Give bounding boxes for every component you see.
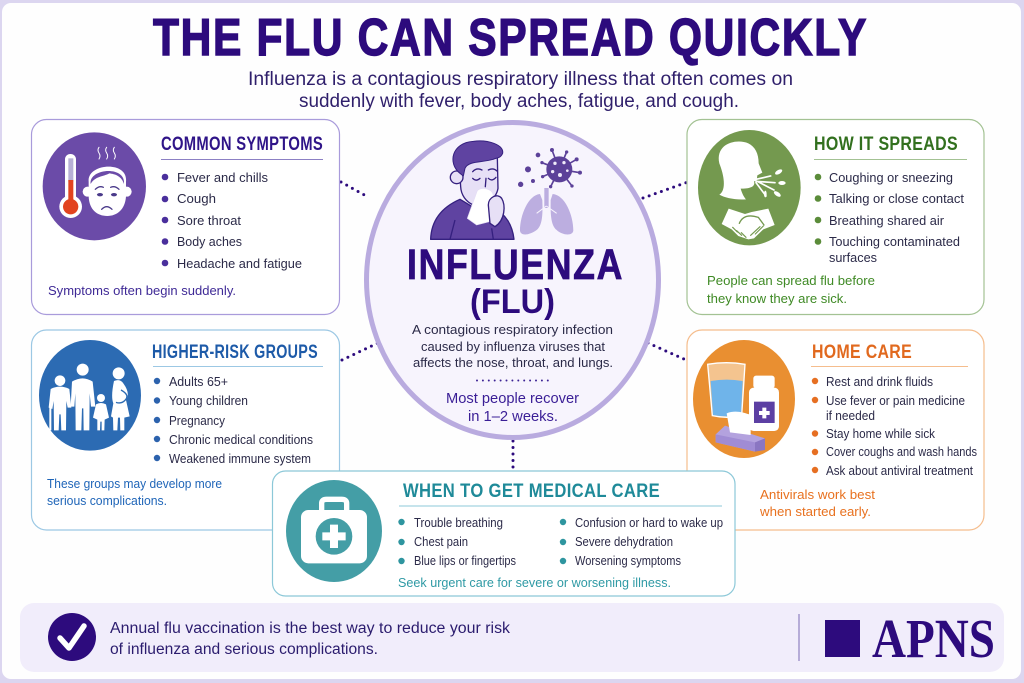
note: risk groups: These groups may develop more [47,476,222,491]
recovery text: in 1–2 weeks. [468,408,558,425]
medical care list: Confusion or hard to wake up [575,515,723,530]
note: risk groups: serious complications. [47,493,167,508]
heading: flu: (FLU) [470,283,555,321]
note: symptoms: Symptoms often begin suddenly. [48,283,236,298]
panel: influenza centre circle [366,122,658,438]
symptoms list: Headache and fatigue [177,256,302,271]
vaccination message [110,620,510,658]
vaccination message: of influenza and serious complications. [110,641,378,658]
medical care list: Severe dehydration [575,534,673,549]
spreads list: Talking or close contact [829,191,964,206]
risk groups list: Young children [169,393,248,408]
spreads list: Breathing shared air [829,213,945,228]
icon: lungs [520,188,573,234]
spreads list: Touching contaminated [829,234,960,249]
icon: check mark [48,613,96,661]
medical care list: Trouble breathing [414,515,503,530]
spreads list: Coughing or sneezing [829,170,953,185]
symptoms list: Cough [177,191,216,206]
panel: vaccination banner [20,603,1004,672]
symptoms list [162,170,302,271]
note: medical care: Seek urgent care for severe or worsening illness. [398,575,671,590]
symptoms list: Fever and chills [177,170,268,185]
note: home care [759,487,875,519]
note: home care: Antivirals work best [760,487,875,502]
home care list: Rest and drink fluids [826,374,933,389]
medical care list: Blue lips or fingertips [414,553,516,568]
definition text: affects the nose, throat, and lungs. [413,355,613,370]
heading: common symptoms: COMMON SYMPTOMS [161,134,323,155]
logo: APNS: APNS [872,608,995,669]
vaccination message: Annual flu vaccination is the best way to reduce your risk [110,620,510,637]
home care list: if needed [826,408,875,423]
recovery text [446,390,579,425]
heading: higher-risk groups: HIGHER-RISK GROUPS [152,342,318,363]
risk groups list: Pregnancy [169,413,225,428]
icon: cough and handshake [698,130,801,245]
panel: higher-risk groups [32,330,340,530]
heading: influenza: INFLUENZA [407,241,624,289]
definition text: A contagious respiratory infection [412,322,613,337]
definition text: caused by influenza viruses that [421,339,605,354]
risk groups list: Weakened immune system [169,451,311,466]
symptoms list: Body aches [177,234,242,249]
home care list [812,374,977,478]
home care list: Use fever or pain medicine [826,393,965,408]
spreads list [815,170,964,265]
panel: how it spreads [687,120,984,314]
icon: virus particle [518,148,582,188]
heading: how it spreads: HOW IT SPREADS [814,134,958,155]
subtitle: Influenza is a contagious respiratory illness that often comes on [248,69,793,90]
home care list: Stay home while sick [826,426,935,441]
risk groups list: Chronic medical conditions [169,432,313,447]
risk groups list: Adults 65+ [169,374,228,389]
note: home care: when started early. [759,504,871,519]
spreads list: surfaces [829,250,877,265]
icon: thermometer and sick face [43,132,146,240]
definition text [412,322,613,370]
note: risk groups [47,476,222,508]
note: spreads: they know they are sick. [707,291,847,306]
panel: common symptoms [32,120,340,314]
subtitle: suddenly with fever, body aches, fatigue, and cough. [299,91,739,112]
medical care list: Chest pain [414,534,468,549]
recovery text: Most people recover [446,390,579,407]
heading: home care: HOME CARE [812,342,912,363]
note: spreads: People can spread flu before [707,273,875,288]
heading: when to get medical care: WHEN TO GET MEDICAL CARE [403,481,660,502]
home care list: Cover coughs and wash hands [826,444,977,459]
icon: first aid kit [286,480,382,582]
subtitle [248,69,793,112]
icon: water, medicine, tissues [693,340,795,458]
symptoms list: Sore throat [177,213,241,228]
icon: person sneezing into tissue [431,141,514,239]
title: THE FLU CAN SPREAD QUICKLY [153,9,868,67]
panel: home care [687,330,984,530]
panel: when to get medical care [272,471,735,596]
dotted connectors [341,182,688,470]
risk groups list [154,374,313,466]
logo: APNS [825,608,995,669]
medical care list [398,515,723,568]
note: spreads [707,273,875,306]
icon: family group [39,340,141,451]
home care list: Ask about antiviral treatment [826,463,973,478]
medical care list: Worsening symptoms [575,553,681,568]
